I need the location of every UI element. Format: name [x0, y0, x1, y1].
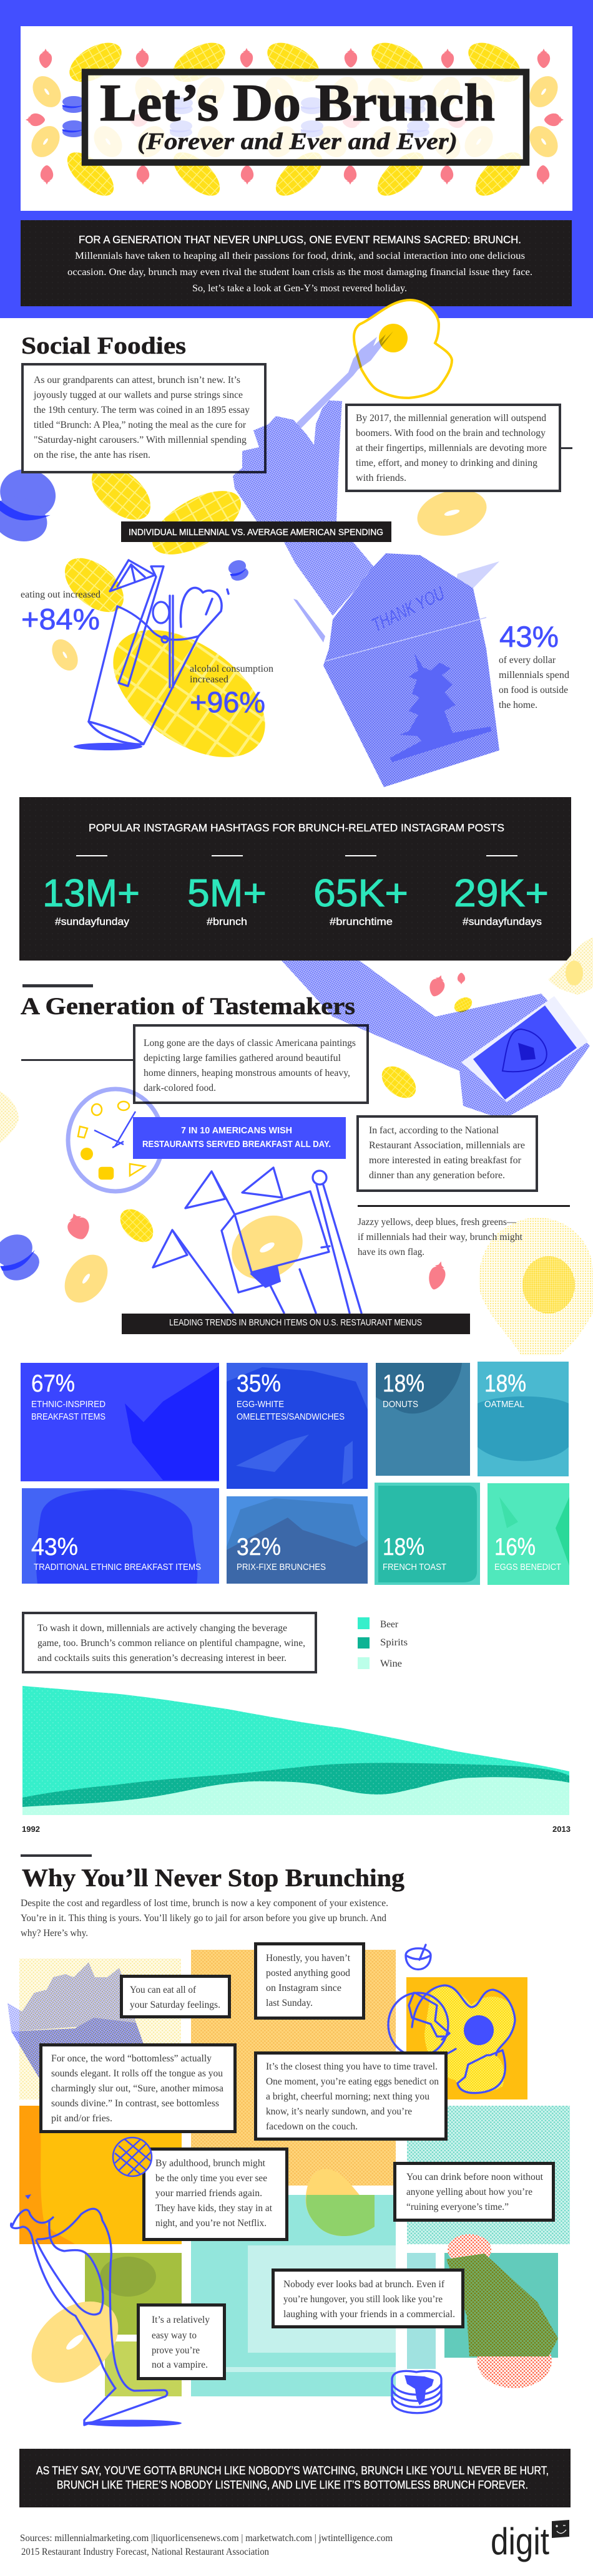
illustration: hand with fork — [233, 331, 393, 616]
icon: clock — [68, 1089, 163, 1191]
intro text: So, let’s take a look at Gen-Y’s most revered holiday. — [192, 283, 407, 294]
text box: saturday feelings: You can eat all of — [130, 1985, 197, 1995]
text box: history: joyously tugged at our wallets and purse strings since — [33, 390, 243, 400]
stat: alcohol: alcohol consumption — [190, 664, 273, 674]
text box: instagram: on Instagram since — [266, 1983, 341, 1993]
text box: national restaurant association: Restaurant Association, millennials are — [369, 1140, 525, 1151]
text box: married friends: night, and you’re not Netflix. — [155, 2218, 267, 2229]
tile: ethnic-inspired — [21, 1363, 219, 1481]
tile: prix-fixe — [227, 1496, 368, 1584]
text box: drink before noon: “ruining everyone’s time.” — [406, 2202, 509, 2212]
logo: digit: digit — [491, 2520, 549, 2562]
text: flag: Jazzy yellows, deep blues, fresh greens— — [358, 1217, 516, 1227]
text box: bottomless: pit and/or fries. — [51, 2113, 112, 2124]
area chart: 2013 — [552, 1824, 571, 1834]
text box: drink before noon: You can drink before noon without — [406, 2172, 544, 2182]
phone — [461, 996, 588, 1102]
x axis labels: 1992 — [22, 1824, 40, 1834]
text box: tastemakers: dark-colored food. — [144, 1083, 216, 1093]
tile: french toast — [375, 1483, 480, 1585]
intro text: why? Here’s why. — [21, 1928, 88, 1939]
panel: title hero — [21, 26, 572, 211]
icon: donut — [56, 1247, 117, 1310]
area chart — [22, 1686, 571, 1834]
text box: commercial — [273, 2270, 463, 2327]
stat: 43 percent: millennials spend — [499, 670, 569, 680]
stat: 43 percent — [499, 620, 569, 710]
text box: saturday feelings — [121, 1976, 230, 2017]
text box: time travel — [256, 2053, 446, 2139]
fork — [293, 331, 393, 432]
text box: spending — [346, 405, 560, 491]
tile: oatmeal: 18% — [484, 1370, 526, 1397]
text box: history — [22, 364, 265, 472]
label bar: menu trends — [122, 1314, 470, 1334]
text box: bottomless: sounds elegant. It rolls off the tongue as you — [51, 2068, 223, 2079]
text box: bottomless: For once, the word “bottomless” actually — [51, 2053, 212, 2064]
text: flag: have its own flag. — [358, 1247, 424, 1257]
legend: Wine — [380, 1658, 402, 1669]
tile: prix-fixe: 32% — [237, 1534, 281, 1561]
section: social foodies food illustrations — [0, 455, 492, 675]
stat: alcohol: +96% — [190, 685, 265, 719]
tile: ethnic-inspired: BREAKFAST ITEMS — [31, 1412, 105, 1422]
text box: spending: with friends. — [356, 473, 406, 483]
text box: tastemakers — [21, 1025, 368, 1103]
sources: 2015 Restaurant Industry Forecast, National Restaurant Association — [21, 2547, 269, 2557]
text box: spending: boomers. With food on the brain and technology — [356, 428, 546, 438]
tile: oatmeal — [478, 1362, 569, 1476]
stat: brunchtime — [313, 855, 408, 927]
icon: waffle — [142, 478, 251, 568]
icon: bowl — [406, 1945, 431, 1970]
text box: tastemakers: depicting large families gathered around beautiful — [144, 1053, 341, 1063]
rule above heading — [22, 984, 93, 987]
stat: 43 percent: 43% — [499, 620, 559, 653]
stat: eating out — [21, 589, 100, 636]
hashtags heading: POPULAR INSTAGRAM HASHTAGS FOR BRUNCH-RELATED INSTAGRAM POSTS — [89, 821, 504, 834]
icon: waffle — [55, 548, 134, 622]
legend — [358, 1617, 408, 1669]
text box: saturday feelings: your Saturday feelings. — [130, 2000, 220, 2010]
icon: cocktail — [74, 560, 228, 750]
icon: champagne glass — [11, 2194, 182, 2426]
icon: waffle — [452, 994, 474, 1015]
icon: macaron — [0, 462, 62, 548]
text box: instagram: last Sunday. — [266, 1998, 313, 2008]
stat: 43 percent: the home. — [499, 700, 537, 710]
sources: Sources: millennialmarketing.com |liquorlicensenews.com | marketwatch.com | jwtintelligence.com — [20, 2533, 393, 2544]
icon: pancake stack — [392, 2371, 441, 2413]
tile: eggs benedict: EGGS BENEDICT — [494, 1562, 561, 1572]
text box: married friends: They have kids, they stay in at — [155, 2203, 273, 2214]
stat: alcohol: increased — [190, 674, 228, 685]
icon: strawberry — [458, 973, 465, 984]
stat: 43 percent: on food is outside — [499, 685, 568, 695]
tile: prix-fixe: PRIX-FIXE BRUNCHES — [237, 1562, 326, 1572]
tile: oatmeal: OATMEAL — [484, 1400, 524, 1410]
stat: brunch — [187, 855, 267, 927]
illustration: fries — [7, 1962, 144, 2083]
legend: Beer — [380, 1619, 399, 1630]
illustration: hand with phone — [282, 961, 590, 1120]
tile: eggs benedict: 16% — [494, 1534, 536, 1561]
tile: french toast: FRENCH TOAST — [383, 1562, 446, 1572]
stat: sundayfundays — [454, 855, 549, 927]
text box: history: on the rise, the ante has risen. — [34, 450, 150, 460]
illustration: donut in teal panel — [306, 2169, 375, 2236]
label bar: spending — [121, 521, 391, 542]
text box: instagram: posted anything good — [266, 1968, 350, 1978]
icon: macaron — [0, 1229, 44, 1286]
text box: commercial: laughing with your friends in a commercial. — [283, 2309, 455, 2320]
panel: egg — [406, 1977, 527, 2099]
area: beer — [22, 1686, 569, 1815]
tile: traditional: TRADITIONAL ETHNIC BREAKFAST ITEMS — [34, 1562, 201, 1572]
icon: fried egg — [354, 300, 452, 398]
callout: breakfast all day: RESTAURANTS SERVED BREAKFAST ALL DAY. — [142, 1139, 331, 1150]
text box: beverages: To wash it down, millennials are actively changing the beverage — [37, 1623, 287, 1634]
tile: donuts — [376, 1363, 470, 1476]
text box: bottomless: charmingly slur out, “Sure, another mimosa — [51, 2083, 223, 2094]
rule above heading — [21, 1854, 92, 1857]
stat: sundayfunday — [42, 855, 140, 927]
icon: strawberry — [426, 1259, 449, 1292]
stat: sundayfunday: #sundayfunday — [55, 916, 130, 927]
intro text: You’re in it. This thing is yours. You’ll likely go to jail for arson before you give up brunch. And — [21, 1913, 386, 1924]
tile: traditional: 43% — [31, 1534, 78, 1561]
text box: commercial: Nobody ever looks bad at brunch. Even if — [283, 2279, 445, 2290]
illustration: flags with donut — [153, 1168, 361, 1313]
illustration: donut left — [16, 2285, 134, 2399]
panel: orange-yellow — [19, 2106, 182, 2244]
intro text — [21, 1898, 388, 1939]
stat: alcohol — [190, 664, 273, 719]
text box: beverages: game, too. Brunch’s common reliance on plentiful champagne, wine, — [37, 1638, 305, 1649]
text box: drink before noon — [395, 2163, 553, 2220]
panel: orange — [191, 1950, 396, 2186]
text box: spending: time, effort, and money to drinking and dining — [356, 458, 537, 468]
stat: 43 percent: of every dollar — [499, 655, 556, 666]
phone screen — [473, 1005, 577, 1100]
subtitle: (Forever and Ever and Ever) — [137, 128, 458, 155]
label bar: menu trends: LEADING TRENDS IN BRUNCH ITEMS ON U.S. RESTAURANT MENUS — [169, 1318, 422, 1328]
tile: eggs benedict — [488, 1483, 569, 1585]
icon: waffle — [376, 1060, 422, 1105]
text box: tastemakers: Long gone are the days of classic Americana paintings — [144, 1038, 356, 1048]
breakfast icons — [78, 1102, 145, 1179]
panel: closing quote — [19, 2449, 571, 2507]
stat: sundayfundays: 29K+ — [454, 872, 549, 915]
text box: time travel: One moment, you’re eating eggs benedict on — [266, 2076, 439, 2087]
text box: married friends: your married friends again. — [155, 2188, 262, 2199]
intro text: occasion. One day, brunch may even rival the student loan crisis as the most damaging financial issue they face. — [67, 267, 532, 278]
icon: strawberry — [64, 1210, 93, 1242]
stat: eating out: +84% — [21, 603, 100, 636]
area: wine — [22, 1777, 569, 1815]
text box: commercial: you’re hungover, you still look like you’re — [283, 2294, 443, 2305]
panel: fries — [19, 1959, 181, 2099]
callout: breakfast all day — [133, 1117, 346, 1159]
text box: beverages: and cocktails suits this generation’s decreasing interest in beer. — [37, 1653, 287, 1663]
text box: history: titled “Brunch: A Plea,” noting the meal as the cure for — [34, 420, 247, 430]
section heading: Why You’ll Never Stop Brunching — [22, 1864, 404, 1892]
intro text: Millennials have taken to heaping all their passions for food, drink, and social interaction into one delicious — [75, 251, 525, 261]
stat: eating out: eating out increased — [21, 589, 100, 600]
intro heading: FOR A GENERATION THAT NEVER UNPLUGS, ONE EVENT REMAINS SACRED: BRUNCH. — [79, 233, 521, 246]
label bar: spending: INDIVIDUAL MILLENNIAL VS. AVERAGE AMERICAN SPENDING — [129, 528, 383, 538]
stat: sundayfunday: 13M+ — [42, 872, 140, 915]
text box: instagram: Honestly, you haven’t — [266, 1953, 351, 1963]
stat: brunch: 5M+ — [187, 872, 267, 915]
stat: brunchtime: #brunchtime — [330, 916, 393, 927]
tile: donuts: 18% — [383, 1370, 424, 1397]
icon: waffle outline — [113, 2138, 152, 2176]
text box: time travel: a bright, cheerful morning; next thing you — [266, 2091, 429, 2102]
pattern: strawberries — [26, 48, 564, 185]
panel: hashtags — [19, 797, 571, 961]
text box: tastemakers: home dinners, heaping monstrous amounts of heavy, — [144, 1068, 350, 1078]
map pin icon — [502, 1029, 547, 1072]
box text: THANK YOU — [369, 583, 448, 636]
area: spirits — [22, 1763, 569, 1815]
pattern: donuts — [26, 70, 564, 165]
text box: history: As our grandparents can attest, brunch isn’t new. It’s — [34, 375, 240, 385]
text box: time travel: It’s the closest thing you have to time travel. — [266, 2061, 438, 2072]
section heading: Social Foodies — [21, 332, 186, 359]
sources — [20, 2533, 393, 2557]
panel: teal laptop — [191, 2195, 396, 2396]
icon: donut in flag — [220, 1203, 314, 1292]
tile: donuts: DONUTS — [383, 1400, 418, 1410]
tile: egg-white — [227, 1363, 368, 1489]
tile: egg-white: OMELETTES/SANDWICHES — [237, 1412, 345, 1422]
collage: colour panels — [19, 1950, 570, 2396]
blue header background — [0, 0, 593, 318]
hand and arm — [233, 400, 375, 616]
icon: macaron — [227, 558, 250, 583]
pagoda — [390, 654, 492, 762]
legend: Spirits — [380, 1637, 408, 1648]
illustration: takeout box — [293, 553, 499, 787]
text box: spending: at their fingertips, millennials are devoting more — [356, 443, 547, 453]
icon: waffle behind cocktail — [91, 604, 288, 783]
illustration: vegetable — [446, 2234, 558, 2388]
intro text — [67, 251, 532, 294]
icon: waffle — [82, 455, 160, 530]
text box: vampire: prove you’re — [152, 2345, 200, 2356]
text: flag — [358, 1205, 570, 1257]
icon: donut — [412, 483, 492, 543]
tile: ethnic-inspired: 67% — [31, 1370, 75, 1397]
decorative food: tastemakers section — [0, 937, 593, 1355]
egg top right — [548, 937, 593, 995]
text box: married friends: By adulthood, brunch might — [155, 2158, 266, 2169]
icon: waffle — [114, 1203, 159, 1248]
text box: national restaurant association: In fact, according to the National — [369, 1125, 499, 1136]
fries tops — [7, 1962, 136, 2031]
text box: spending: By 2017, the millennial generation will outspend — [356, 413, 546, 424]
intro text: Despite the cost and regardless of lost time, brunch is now a key component of your existence. — [21, 1898, 388, 1909]
text box: history: the 19th century. The term was coined in an 1895 essay — [34, 405, 250, 415]
title: Let’s Do Brunch — [100, 74, 495, 132]
text box: drink before noon: anyone yelling about how you’re — [406, 2187, 532, 2197]
text box: vampire: It’s a relatively — [152, 2315, 210, 2325]
panel: green — [85, 2253, 182, 2335]
text box: national restaurant association: dinner than any generation before. — [369, 1170, 505, 1181]
egg left — [0, 1092, 19, 1143]
tile: french toast: 18% — [383, 1534, 424, 1561]
panel: lime — [105, 2341, 182, 2396]
pattern: macarons — [62, 96, 429, 137]
tile: ethnic-inspired: ETHNIC-INSPIRED — [31, 1400, 105, 1410]
text box: bottomless: sounds divine.” In contrast, see bottomless — [51, 2098, 219, 2109]
icon: cracked egg — [388, 1985, 515, 2093]
text box: history: "Saturday-night carousers.” With millennial spending — [34, 435, 247, 445]
tile: traditional — [22, 1488, 219, 1584]
tile: egg-white: 35% — [237, 1370, 281, 1397]
text box: bottomless — [41, 2045, 235, 2132]
egg bottom right — [479, 1218, 593, 1355]
tile: egg-white: EGG-WHITE — [237, 1400, 284, 1410]
panel: teal strip — [407, 2253, 436, 2369]
text box: married friends: be the only time you ever see — [155, 2173, 267, 2184]
stat: brunch: #brunch — [207, 916, 247, 927]
stat: brunchtime: 65K+ — [313, 872, 408, 915]
text box: time travel: know, it’s nearly sundown, and you’re — [266, 2106, 412, 2117]
icon: donut — [47, 635, 83, 675]
fries carton — [11, 2018, 144, 2083]
panel: teal halftone — [407, 2106, 570, 2244]
pattern: waffles — [60, 35, 529, 203]
text box: vampire: easy way to — [152, 2330, 197, 2341]
panel: intro — [21, 220, 572, 306]
panel: teal right — [444, 2253, 558, 2358]
text box: vampire: not a vampire. — [152, 2360, 208, 2370]
icon: strawberry — [426, 973, 448, 999]
title frame — [85, 72, 526, 162]
text box: married friends — [144, 2149, 287, 2239]
text box: beverages — [23, 1613, 316, 1672]
section heading: A Generation of Tastemakers — [21, 993, 355, 1020]
text box: time travel: facedown on the couch. — [266, 2121, 358, 2132]
stat: sundayfundays: #sundayfundays — [463, 916, 542, 927]
text box: vampire — [139, 2305, 225, 2379]
text box: national restaurant association — [358, 1116, 537, 1191]
text box: national restaurant association: more interested in eating breakfast for — [369, 1155, 522, 1166]
callout: breakfast all day: 7 IN 10 AMERICANS WISH — [181, 1125, 292, 1136]
text box: instagram — [256, 1944, 363, 2018]
text: flag: if millennials had their way, brunch might — [358, 1232, 523, 1242]
